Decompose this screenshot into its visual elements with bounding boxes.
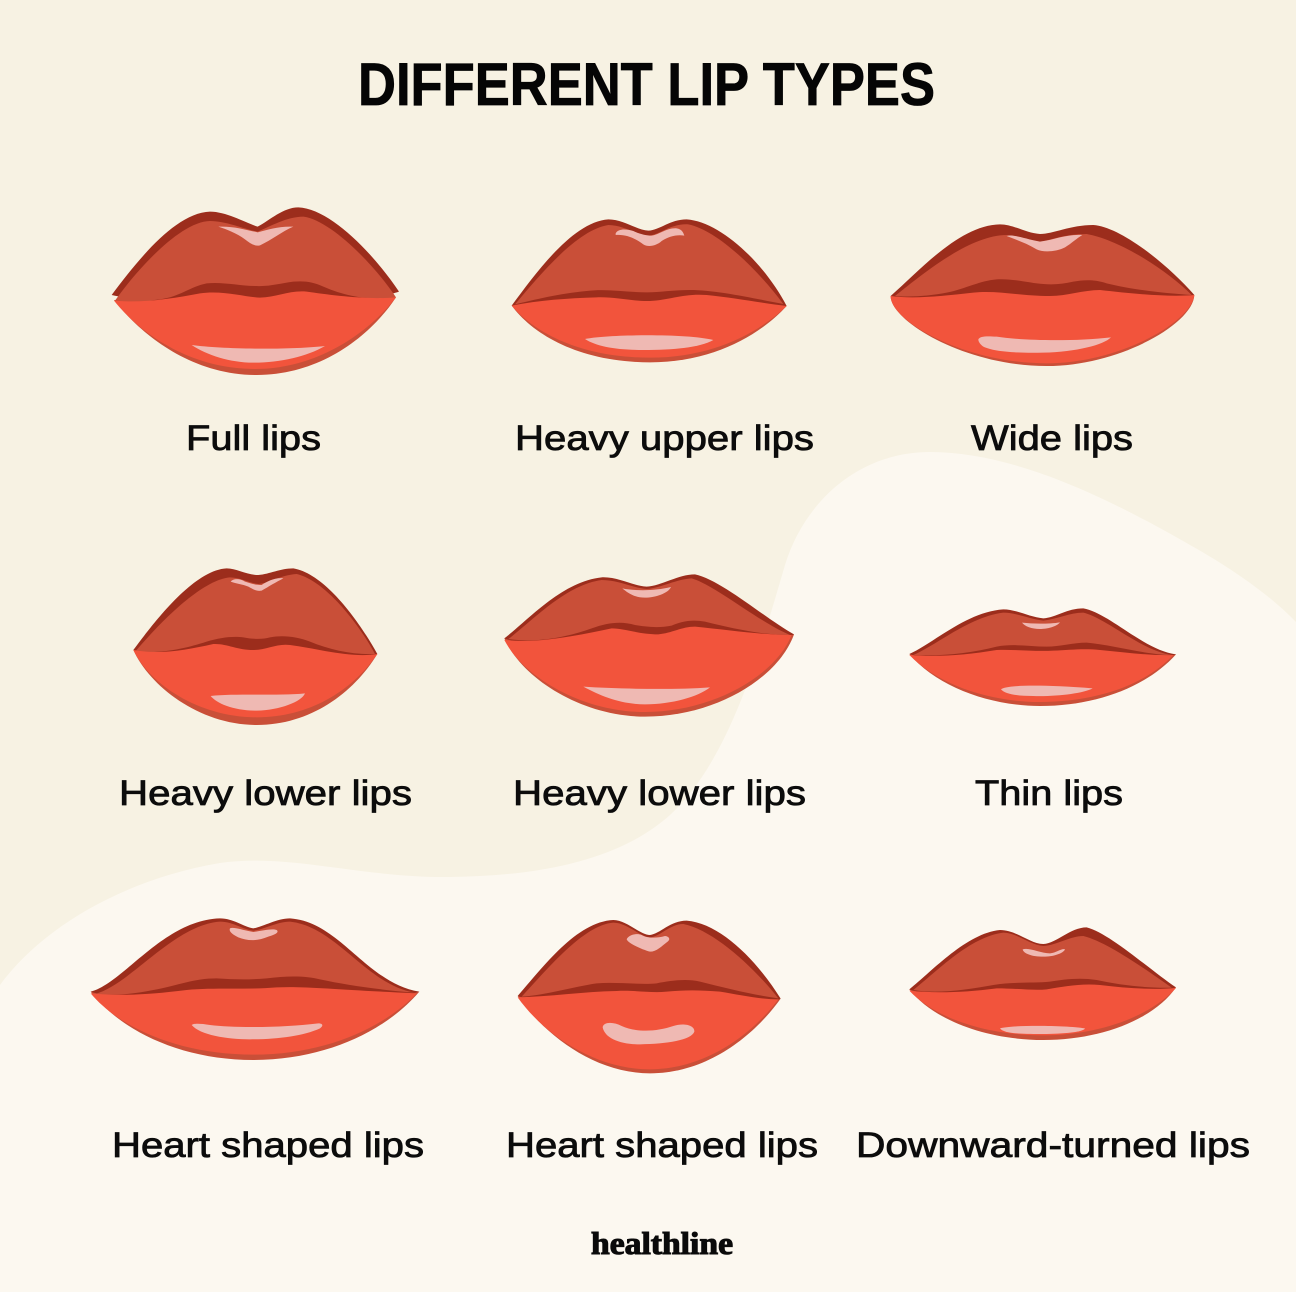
panel: heavy lower lips, first — [119, 568, 412, 813]
panel: thin lips — [909, 608, 1176, 813]
label: downward-turned lips: Downward-turned lips — [856, 1126, 1250, 1165]
label: heavy lower lips, second: Heavy lower lips — [513, 774, 806, 813]
illustration: full lips — [112, 207, 399, 375]
illustration: thin lips — [909, 608, 1176, 706]
illustration: heavy lower lips, second — [504, 574, 794, 717]
illustration: heart shaped lips, first — [91, 918, 419, 1060]
illustration: heavy upper lips — [512, 219, 787, 362]
illustration: heavy lower lips, first — [133, 568, 377, 725]
label: wide lips: Wide lips — [971, 419, 1133, 458]
label: full lips: Full lips — [186, 419, 321, 458]
label: thin lips: Thin lips — [975, 774, 1123, 813]
illustration: heart shaped lips, second — [518, 920, 781, 1073]
illustration: downward-turned lips — [909, 927, 1176, 1040]
panel: wide lips — [891, 224, 1194, 458]
title: DIFFERENT LIP TYPES — [358, 51, 935, 118]
panel: full lips — [112, 207, 399, 458]
panel: heavy lower lips, second — [504, 574, 806, 813]
panel: heart shaped lips, second — [506, 920, 818, 1165]
label: heart shaped lips, second: Heart shaped lips — [506, 1126, 818, 1165]
label: heart shaped lips, first: Heart shaped lips — [112, 1126, 424, 1165]
label: heavy lower lips, first: Heavy lower lips — [119, 774, 412, 813]
panel: heart shaped lips, first — [91, 918, 424, 1165]
label: heavy upper lips: Heavy upper lips — [515, 419, 814, 458]
panel: downward-turned lips — [856, 927, 1250, 1165]
panel: heavy upper lips — [512, 219, 814, 458]
logo: healthline: healthline — [591, 1225, 733, 1261]
illustration: wide lips — [891, 224, 1194, 366]
